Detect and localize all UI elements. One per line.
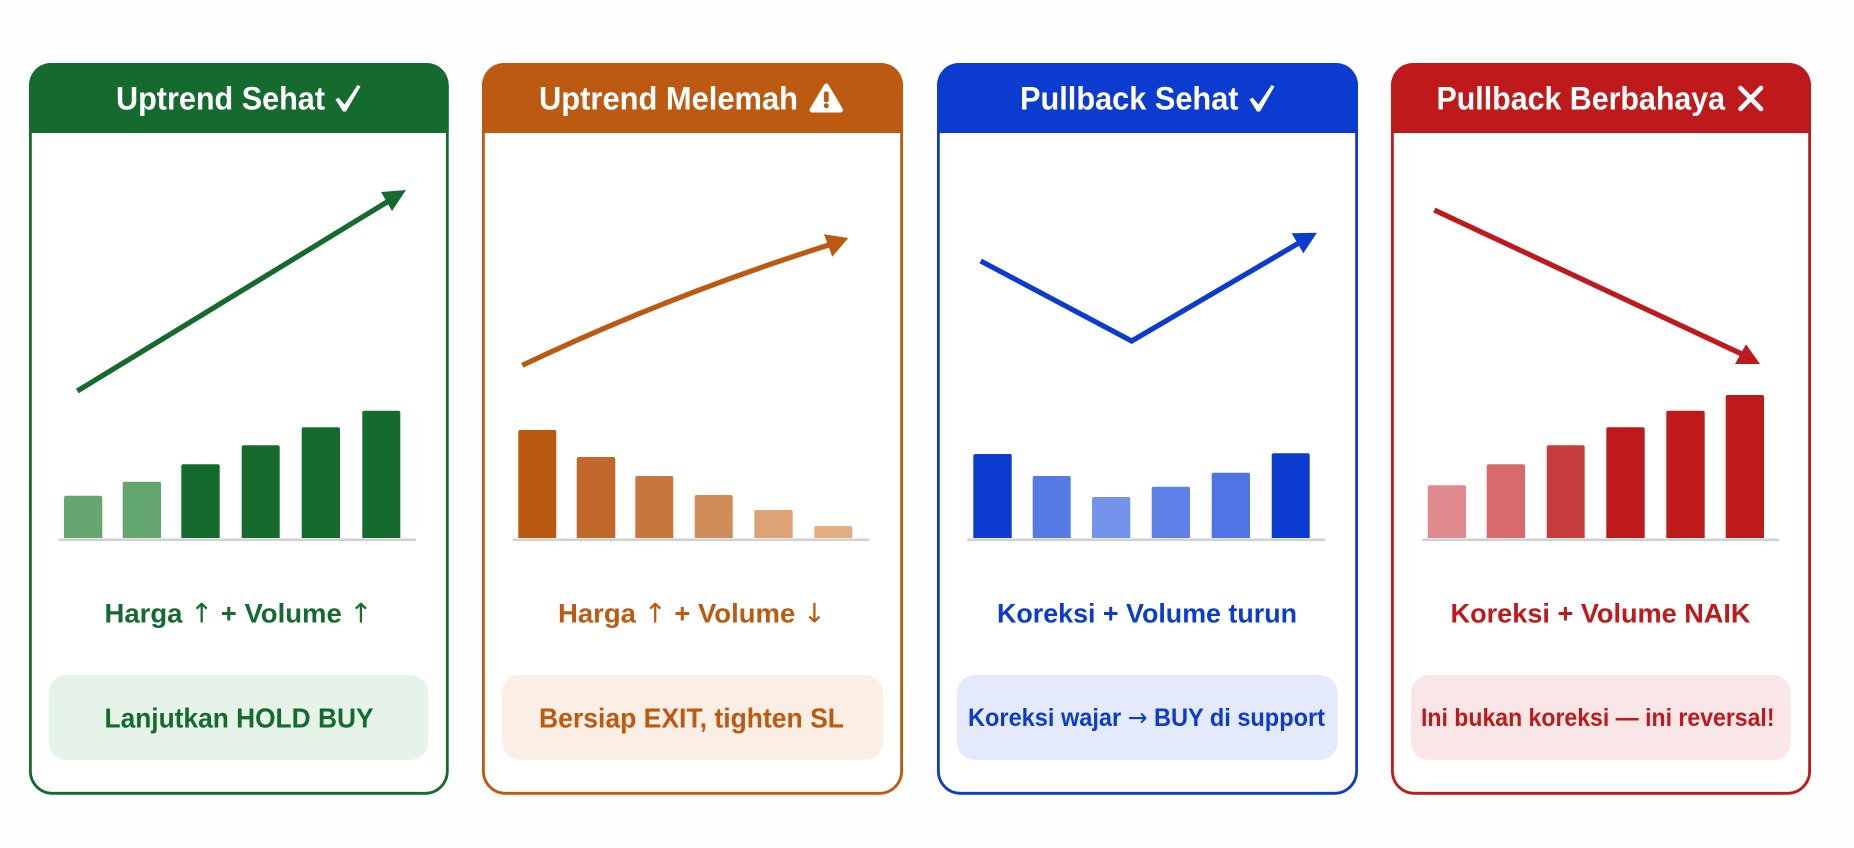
panel: Pullback Berbahaya <box>1391 63 1811 793</box>
header bar <box>937 63 1358 133</box>
panel: Uptrend Sehat <box>29 63 449 793</box>
icon: check mark <box>1250 85 1274 112</box>
bar chart: volume falling <box>513 430 869 541</box>
callout: Bersiap EXIT, tighten SL <box>539 703 844 734</box>
callout <box>502 675 883 760</box>
card frame <box>1392 64 1810 793</box>
panel: Pullback Sehat <box>937 63 1358 793</box>
heading: Pullback Berbahaya <box>1436 80 1725 116</box>
arrow: price falling <box>1434 210 1760 364</box>
header bar <box>29 63 449 133</box>
heading: Pullback Sehat <box>1020 80 1239 116</box>
condition label: Koreksi + Volume NAIK <box>1450 599 1751 629</box>
header bar <box>1391 63 1811 133</box>
bar chart: volume rising <box>1422 395 1779 541</box>
card frame <box>483 64 902 793</box>
arrow: price rising weakly <box>522 234 848 365</box>
icon: warning triangle <box>812 86 840 110</box>
bar chart: volume rising <box>59 411 416 541</box>
heading: Uptrend Melemah <box>539 80 798 116</box>
callout <box>49 675 428 760</box>
icon: check mark <box>336 85 360 112</box>
card frame <box>30 64 447 793</box>
condition label: Koreksi + Volume turun <box>997 599 1297 629</box>
callout: Ini bukan koreksi — ini reversal! <box>1421 704 1774 732</box>
callout: Koreksi wajar → BUY di support <box>968 703 1326 732</box>
callout <box>1411 675 1791 760</box>
callout <box>957 675 1338 760</box>
panel: Uptrend Melemah <box>482 63 903 793</box>
header bar <box>482 63 903 133</box>
arrow: price rising <box>77 190 406 391</box>
arrow: correction then recovery <box>981 233 1317 341</box>
condition label: Harga ↑ + Volume ↑ <box>104 599 372 630</box>
condition label: Harga ↑ + Volume ↓ <box>558 599 826 630</box>
bar chart: volume dips <box>967 453 1325 541</box>
icon: cross mark <box>1740 88 1761 109</box>
callout: Lanjutkan HOLD BUY <box>104 703 374 734</box>
heading: Uptrend Sehat <box>116 80 325 116</box>
card frame <box>938 64 1357 793</box>
